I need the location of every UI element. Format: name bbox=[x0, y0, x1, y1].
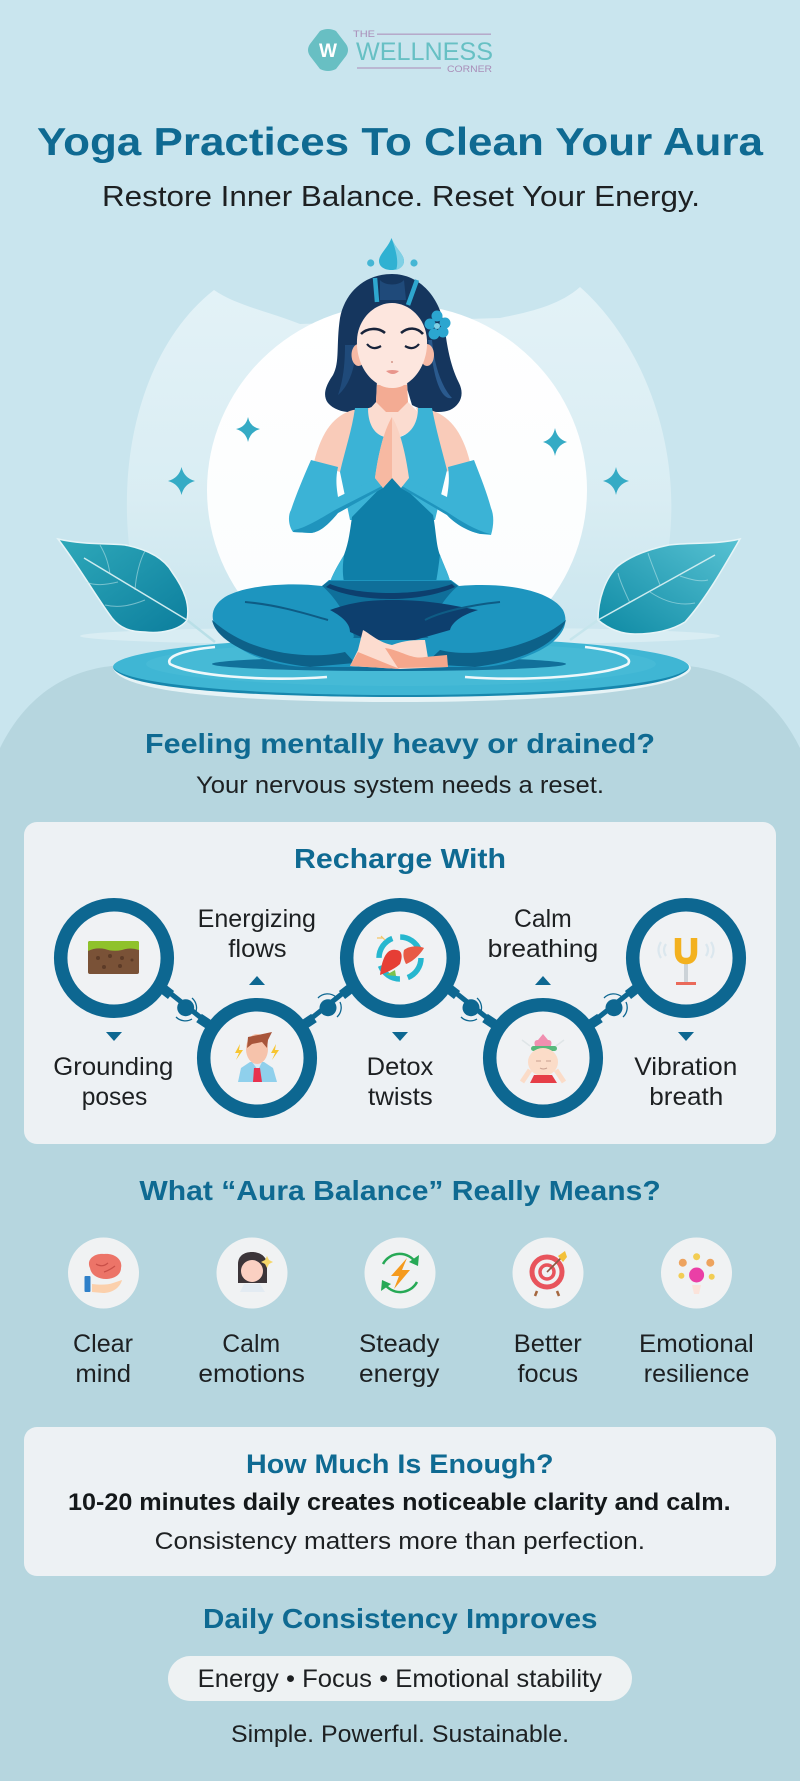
benefit: better focus bbox=[512, 1238, 584, 1388]
benefit: clear mind: Clear bbox=[73, 1330, 133, 1358]
pointer triangles bbox=[106, 976, 694, 1041]
logo: The Wellness Corner: THE bbox=[353, 29, 375, 40]
left leaf bbox=[58, 539, 215, 642]
left arm sleeve bbox=[289, 460, 383, 533]
subtitle: Restore Inner Balance. Reset Your Energy. bbox=[102, 181, 700, 213]
connector nodes bbox=[176, 994, 627, 1021]
logo: The Wellness Corner: CORNER bbox=[447, 64, 492, 75]
white aura circle bbox=[207, 304, 587, 676]
benefit: clear mind bbox=[68, 1238, 139, 1388]
recharge labels: twists bbox=[368, 1083, 433, 1111]
sparkle stars bbox=[168, 417, 629, 495]
arm shading bbox=[293, 486, 490, 534]
rings bbox=[61, 905, 739, 1111]
tank top bbox=[340, 408, 447, 520]
panel: how much is enough: 10-20 minutes daily creates noticeable clarity and calm. bbox=[68, 1489, 731, 1516]
facial features bbox=[361, 329, 423, 374]
recharge labels: Vibration bbox=[634, 1053, 737, 1081]
icon: liver detox bbox=[377, 936, 424, 979]
background hump: lower section bbox=[0, 665, 800, 1781]
mat shadow bbox=[212, 657, 566, 671]
panel: how much is enough bbox=[24, 1427, 776, 1576]
torso side highlights bbox=[329, 555, 451, 585]
benefit: steady energy: energy bbox=[359, 1360, 440, 1388]
connectors between rings bbox=[160, 985, 639, 1025]
right leaf bbox=[570, 539, 740, 640]
torso bbox=[329, 476, 451, 585]
logo: The Wellness Corner: W bbox=[319, 41, 337, 62]
pants: crossed legs bbox=[212, 580, 566, 667]
icon: soil and grass bbox=[88, 941, 139, 974]
panel heading: Recharge With bbox=[294, 843, 506, 874]
benefit: clear mind: mind bbox=[75, 1360, 131, 1388]
closing line: Simple. Powerful. Sustainable. bbox=[231, 1721, 569, 1748]
water drop above head bbox=[367, 238, 418, 270]
benefit: better focus: Better bbox=[514, 1330, 582, 1358]
recharge labels: flows bbox=[228, 935, 287, 963]
ears bbox=[352, 344, 366, 366]
hair bbox=[325, 274, 462, 412]
recharge labels: Grounding bbox=[53, 1053, 173, 1081]
logo: The Wellness Corner: WELLNESS bbox=[356, 38, 493, 66]
yoga mat bbox=[113, 637, 691, 702]
praying hands bbox=[375, 417, 409, 488]
recharge labels bbox=[53, 905, 737, 1111]
section heading: feeling heavy: Feeling mentally heavy or drained? bbox=[145, 728, 655, 759]
benefit: steady energy: Steady bbox=[359, 1330, 440, 1358]
section heading: daily consistency: Daily Consistency Improves bbox=[203, 1603, 598, 1634]
recharge labels: Calm bbox=[514, 905, 572, 933]
section subheading: Your nervous system needs a reset. bbox=[196, 772, 604, 799]
benefit: emotional resilience: Emotional bbox=[639, 1330, 754, 1358]
recharge labels: breath bbox=[649, 1083, 723, 1111]
icon: tuning fork bbox=[658, 938, 714, 985]
panel: how much is enough: Consistency matters more than perfection. bbox=[155, 1528, 645, 1555]
white ring arcs on mat bbox=[169, 647, 629, 679]
recharge labels: poses bbox=[82, 1083, 147, 1111]
logo: The Wellness Corner bbox=[308, 29, 493, 75]
section heading: aura balance: What “Aura Balance” Really Means? bbox=[139, 1175, 661, 1206]
benefit: steady energy bbox=[359, 1238, 440, 1388]
mist bands bbox=[80, 627, 720, 645]
icon: lotus head bbox=[522, 1034, 564, 1083]
icon: energized man bbox=[235, 1032, 279, 1082]
title: Yoga Practices To Clean Your Aura bbox=[37, 121, 763, 164]
benefit: calm emotions: Calm bbox=[222, 1330, 280, 1358]
benefit: calm emotions: emotions bbox=[198, 1360, 305, 1388]
benefit: emotional resilience bbox=[639, 1238, 754, 1388]
neck and shoulders bbox=[314, 380, 470, 472]
aura lotus petals bbox=[127, 287, 671, 640]
benefit: emotional resilience: resilience bbox=[644, 1360, 749, 1388]
hairband stripes bbox=[375, 278, 417, 305]
right arm sleeve bbox=[401, 460, 493, 535]
recharge labels: Energizing bbox=[198, 905, 316, 933]
hair flower bbox=[424, 310, 450, 340]
recharge labels: breathing bbox=[488, 935, 598, 963]
benefit: better focus: focus bbox=[518, 1360, 578, 1388]
benefit: calm emotions bbox=[198, 1238, 305, 1388]
face bbox=[357, 303, 427, 388]
recharge labels: Detox bbox=[367, 1053, 434, 1081]
panel: recharge with bbox=[24, 822, 776, 1144]
logo mark bbox=[308, 29, 348, 71]
crossed feet bbox=[350, 630, 448, 669]
panel: how much is enough: How Much Is Enough? bbox=[246, 1449, 554, 1479]
pill: energy, focus, emotional stability: Energy • Focus • Emotional stability bbox=[198, 1665, 603, 1693]
hero illustration: meditating woman bbox=[58, 238, 740, 702]
pill: energy, focus, emotional stability bbox=[168, 1656, 632, 1701]
